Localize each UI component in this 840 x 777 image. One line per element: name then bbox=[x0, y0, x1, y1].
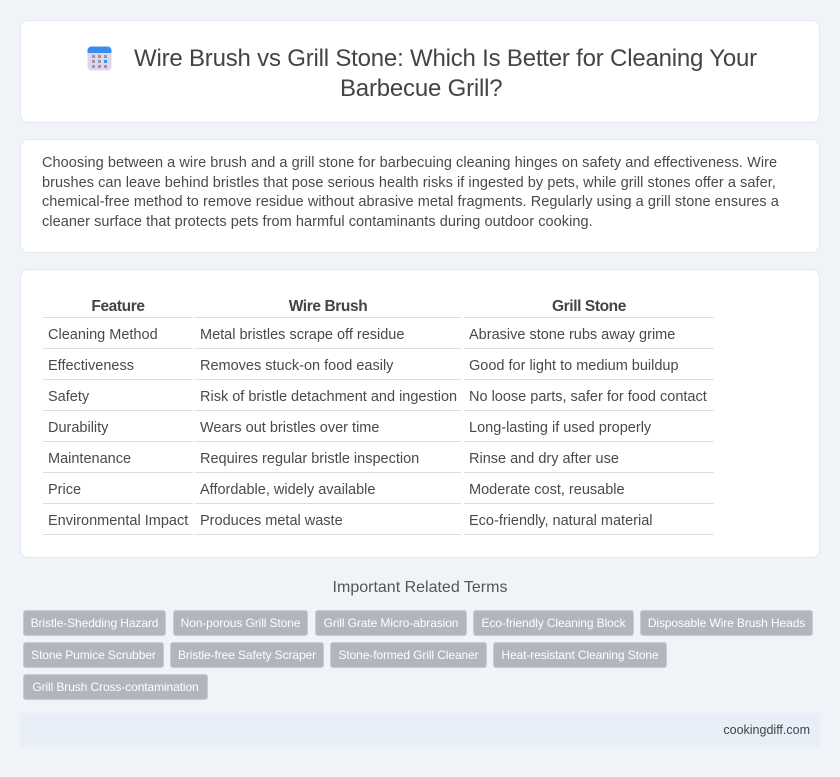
related term tags: Eco-friendly Cleaning Block bbox=[481, 616, 626, 630]
icon: calendar bbox=[88, 46, 112, 70]
table rows: Good for light to medium buildup bbox=[469, 358, 679, 374]
footer bar bbox=[20, 713, 820, 747]
table header bbox=[91, 298, 626, 315]
table rows: Cleaning Method bbox=[48, 327, 158, 343]
related term tags: Stone Pumice Scrubber bbox=[31, 648, 156, 662]
table rows: Price bbox=[48, 482, 81, 498]
table header: Feature bbox=[91, 298, 145, 315]
intro paragraph: Choosing between a wire brush and a grill stone for barbecuing cleaning hinges on safety and effectiveness. Wire bbox=[42, 155, 777, 171]
table rows: Long-lasting if used properly bbox=[469, 420, 651, 436]
table rows: Wears out bristles over time bbox=[200, 420, 379, 436]
table rows: Produces metal waste bbox=[200, 513, 343, 529]
related term tags: Bristle-free Safety Scraper bbox=[178, 648, 316, 662]
table rows: Environmental Impact bbox=[48, 513, 188, 529]
table rows: Metal bristles scrape off residue bbox=[200, 327, 404, 343]
table rows: Moderate cost, reusable bbox=[469, 482, 625, 498]
table rows: Eco-friendly, natural material bbox=[469, 513, 652, 529]
table rows: Risk of bristle detachment and ingestion bbox=[200, 389, 457, 405]
related term tags: Heat-resistant Cleaning Stone bbox=[501, 648, 659, 662]
table rows: Abrasive stone rubs away grime bbox=[469, 327, 675, 343]
related term tags bbox=[23, 610, 813, 700]
related term tags: Bristle-Shedding Hazard bbox=[31, 616, 158, 630]
title: Barbecue Grill? bbox=[340, 75, 502, 102]
footer source text: cookingdiff.com bbox=[723, 723, 810, 737]
related term tags: Grill Grate Micro-abrasion bbox=[324, 616, 458, 630]
table rows: Rinse and dry after use bbox=[469, 451, 619, 467]
table header: Wire Brush bbox=[289, 298, 367, 315]
table rows: Maintenance bbox=[48, 451, 131, 467]
table rows bbox=[43, 317, 714, 535]
panel: comparison table bbox=[20, 269, 820, 558]
table rows: Durability bbox=[48, 420, 108, 436]
related term tags: Stone-formed Grill Cleaner bbox=[338, 648, 479, 662]
related term tags: Non-porous Grill Stone bbox=[181, 616, 300, 630]
intro paragraph: brushes can leave behind bristles that pose serious health risks if ingested by pets, while grill stones offer a safer, bbox=[42, 175, 776, 191]
related term tags: Grill Brush Cross-contamination bbox=[32, 680, 199, 694]
title: Wire Brush vs Grill Stone: Which Is Better for Cleaning Your bbox=[134, 45, 757, 72]
table rows: Effectiveness bbox=[48, 358, 134, 374]
intro paragraph: cleaner surface that protects pets from harmful contaminants during outdoor cooking. bbox=[42, 214, 593, 230]
intro paragraph: chemical-free method to remove residue without abrasive metal fragments. Regularly using a grill stone ensures a bbox=[42, 194, 779, 210]
table rows: Requires regular bristle inspection bbox=[200, 451, 419, 467]
table rows: Affordable, widely available bbox=[200, 482, 375, 498]
related term tags: Disposable Wire Brush Heads bbox=[648, 616, 805, 630]
table rows: Removes stuck-on food easily bbox=[200, 358, 393, 374]
panel: introduction text bbox=[20, 139, 820, 253]
heading: related terms: Important Related Terms bbox=[333, 579, 507, 596]
title bbox=[134, 45, 757, 102]
panel: title header bbox=[20, 20, 820, 123]
table header: Grill Stone bbox=[552, 298, 626, 315]
table rows: No loose parts, safer for food contact bbox=[469, 389, 707, 405]
intro paragraph bbox=[42, 155, 779, 230]
table rows: Safety bbox=[48, 389, 89, 405]
